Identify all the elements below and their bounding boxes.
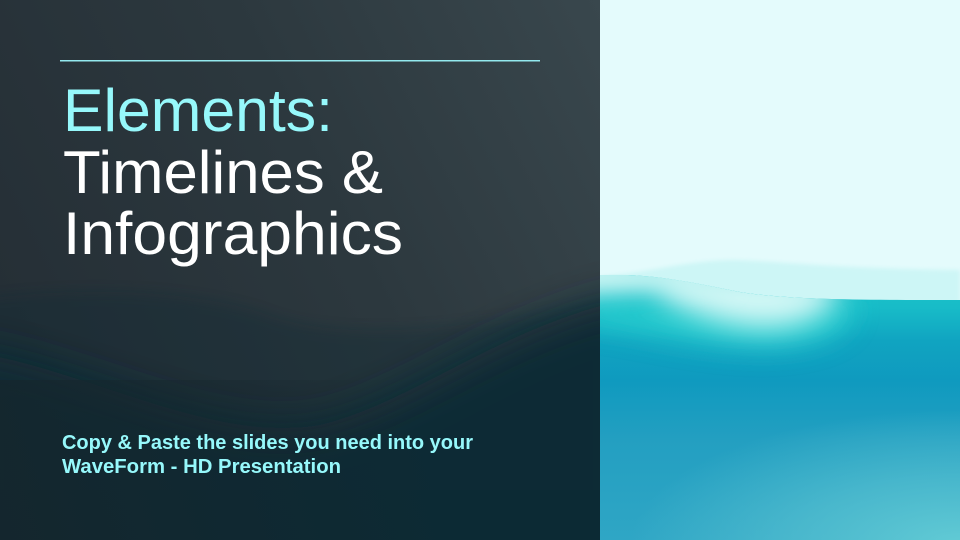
title line: Elements: Elements: xyxy=(63,77,333,144)
title line: Infographics: Infographics xyxy=(63,200,403,267)
title xyxy=(63,77,403,267)
subtitle text block xyxy=(62,432,473,478)
panel: bright right wave background xyxy=(570,0,960,540)
subtitle line one: Copy & Paste the slides you need into your xyxy=(62,432,473,454)
panel: dark left background xyxy=(0,0,640,540)
subtitle line two: WaveForm - HD Presentation xyxy=(62,456,341,478)
divider rule xyxy=(60,60,540,62)
title line: Timelines: Timelines & xyxy=(63,139,383,206)
